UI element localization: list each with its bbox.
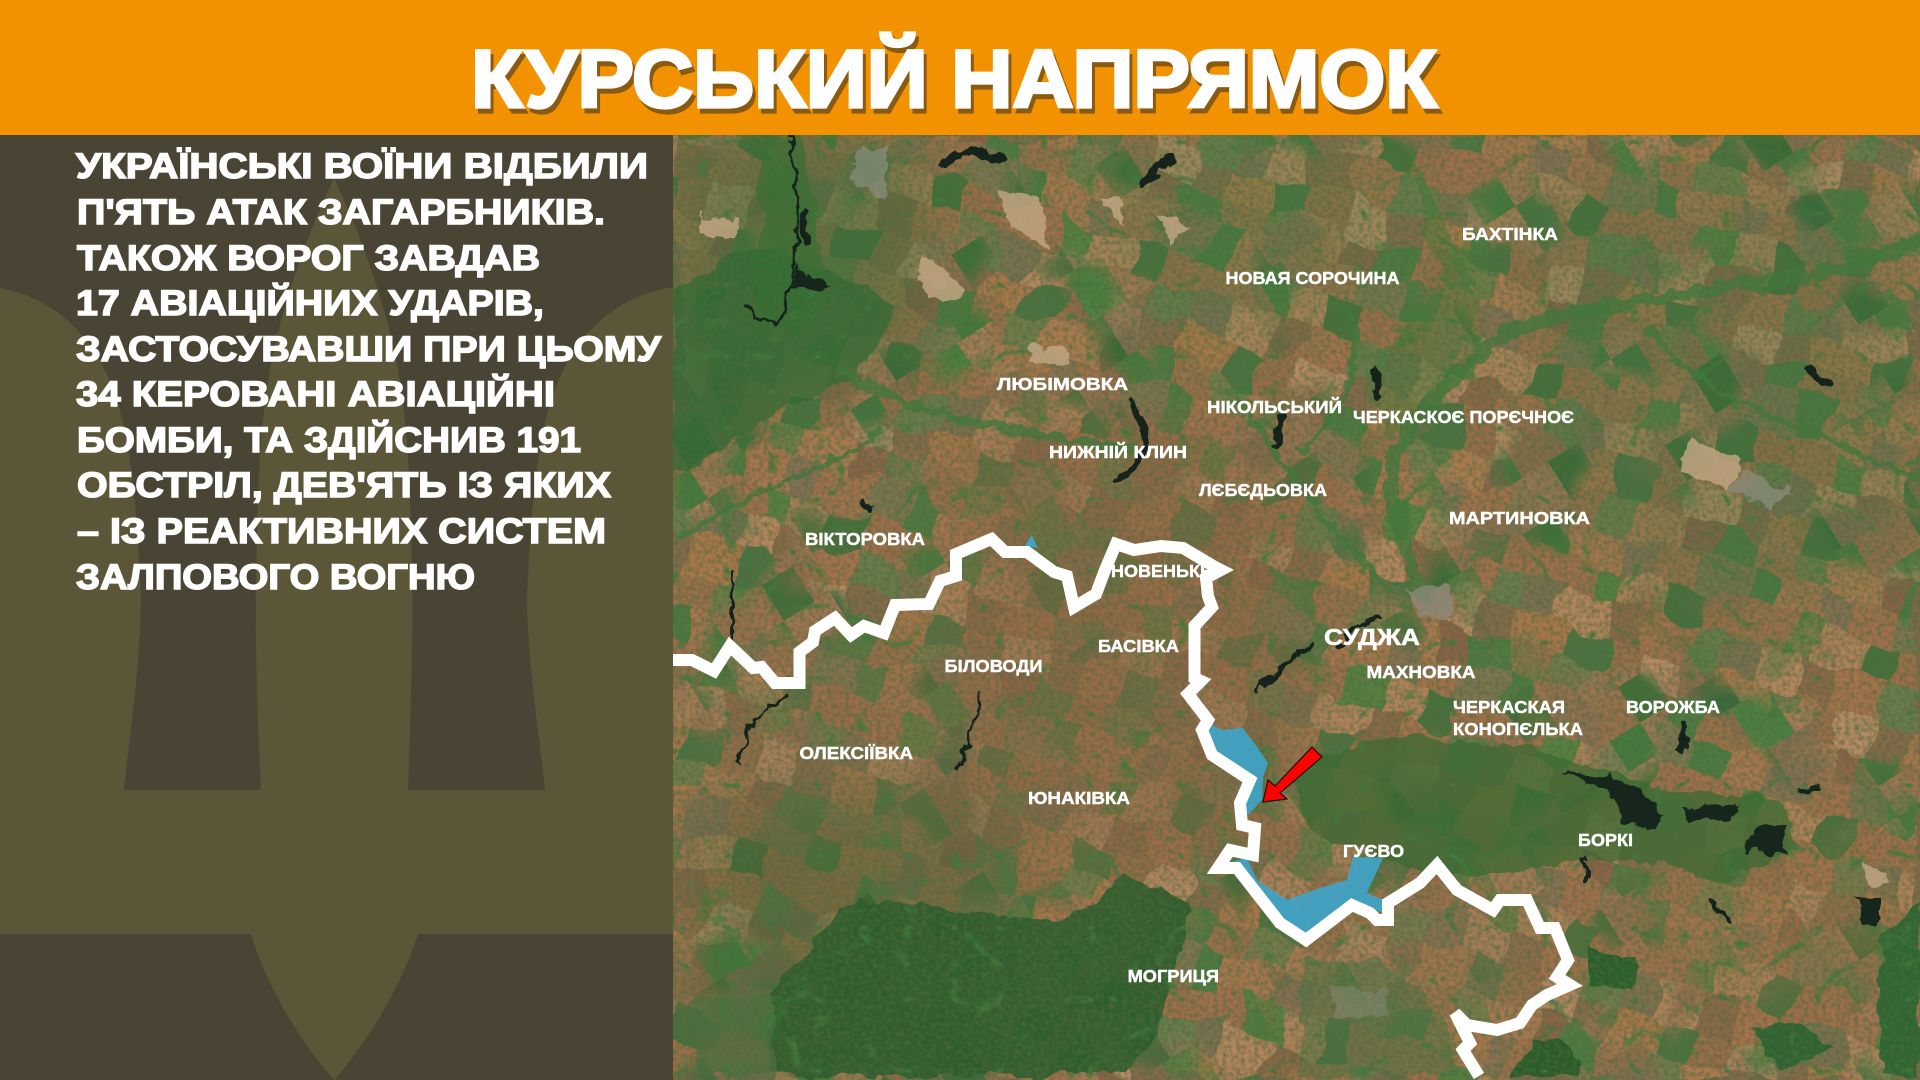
ponds and streams [732,135,1830,925]
place labels: ЧЕРКАСКОЄ ПОРЄЧНОЄ [1353,407,1574,427]
place labels: БІЛОВОДИ [944,656,1042,676]
blue advance zone: bottom [1227,857,1388,935]
light tan fields [700,190,1890,890]
body text: П'ЯТЬ АТАК ЗАГАРБНИКІВ. [77,192,605,232]
trident emblem [0,178,673,1080]
place labels: ЛЮБІМОВКА [997,374,1128,394]
place labels: НОВЕНЬКЕ [1111,561,1212,581]
body text: 17 АВІАЦІЙНИХ УДАРІВ, [76,283,544,323]
satellite map [673,135,1920,1080]
place labels: НІКОЛЬСЬКИЙ [1207,396,1342,417]
place labels: ВОРОЖБА [1626,697,1720,717]
place labels: МАХНОВКА [1366,662,1476,682]
dark woods [790,265,1880,925]
front line border [673,539,1570,1076]
place labels: ОЛЕКСІЇВКА [800,743,913,763]
place labels: ЧЕРКАСКАЯ [1453,697,1565,717]
place labels: СУДЖА [1324,624,1420,650]
place labels: МОГРИЦЯ [1128,966,1219,986]
place labels: ЛЄБЄДЬОВКА [1199,480,1327,500]
place labels: ВІКТОРОВКА [805,529,925,549]
place labels: КОНОПЄЛЬКА [1453,719,1583,739]
blue advance zone: small [1025,535,1038,548]
place labels: ЮНАКІВКА [1028,788,1130,808]
body text: – ІЗ РЕАКТИВНИХ СИСТЕМ [77,511,606,551]
body text: ОБСТРІЛ, ДЕВ'ЯТЬ ІЗ ЯКИХ [77,465,611,505]
body text: ЗАЛПОВОГО ВОГНЮ [76,557,475,597]
title: КУРСЬКИЙ НАПРЯМОК [471,33,1438,125]
place labels: БОРКІ [1578,830,1633,850]
body text: БОМБИ, ТА ЗДІЙСНИВ 191 [77,420,581,460]
green valleys [680,240,1920,597]
red arrow [1263,747,1322,802]
place labels: ГУЄВО [1343,841,1404,861]
body text: 34 КЕРОВАНІ АВІАЦІЙНІ [76,374,555,414]
header bar [0,0,1920,135]
blue advance zone: top [1208,725,1268,815]
left panel background [0,135,673,1080]
towns [850,145,1790,1018]
body text: ТАКОЖ ВОРОГ ЗАВДАВ [77,238,540,278]
place labels: НИЖНІЙ КЛИН [1049,441,1187,462]
body text [76,146,662,597]
place labels: МАРТИНОВКА [1449,508,1590,528]
body text: ЗАСТОСУВАВШИ ПРИ ЦЬОМУ [76,329,662,369]
place labels: БАХТІНКА [1462,224,1558,244]
place labels: НОВАЯ СОРОЧИНА [1226,268,1400,288]
body text: УКРАЇНСЬКІ ВОЇНИ ВІДБИЛИ [76,146,648,186]
place labels [800,224,1720,986]
place labels: БАСІВКА [1098,636,1179,656]
